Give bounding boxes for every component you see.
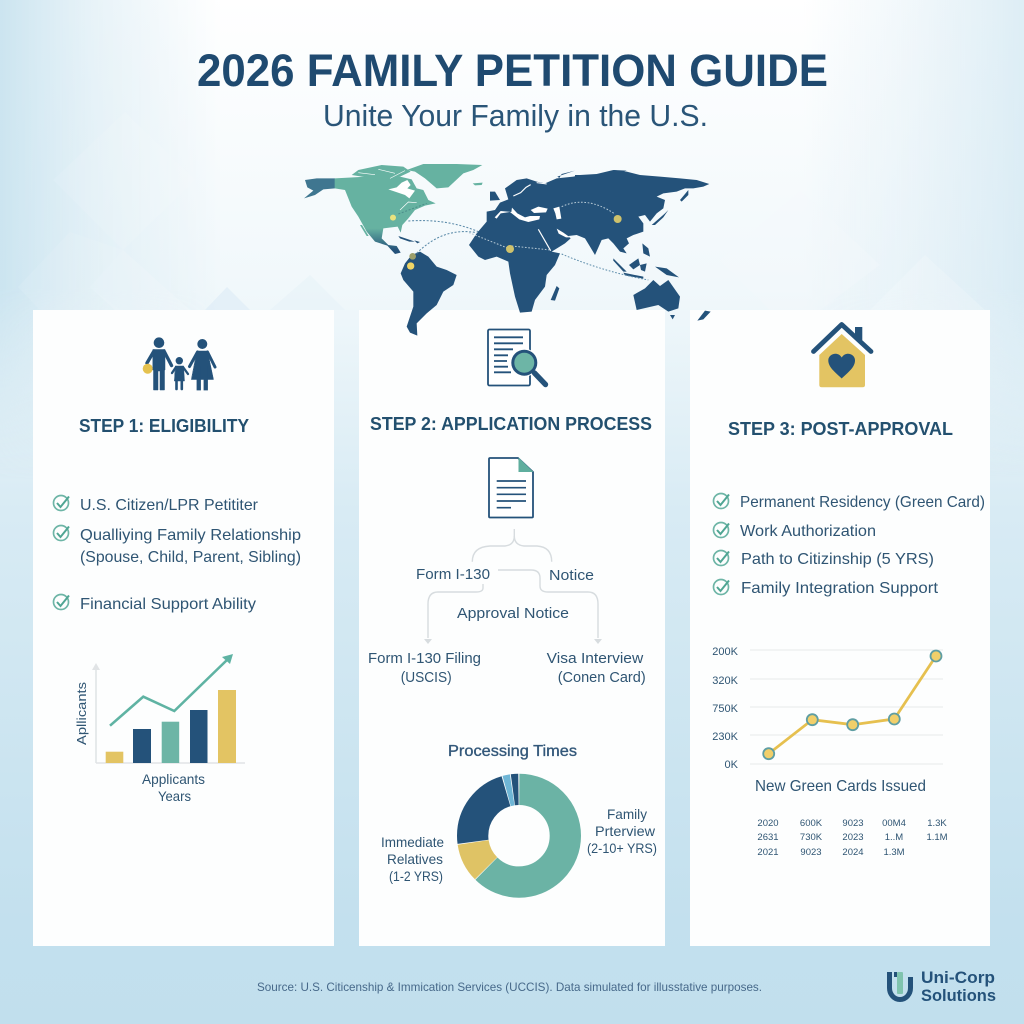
flowchart: process tree: Notice [549,567,594,584]
world map [304,164,711,336]
donut chart: processing times: Processing Times [448,743,577,760]
data table: green cards by year: 2021 [757,847,779,858]
data table: green cards by year: 1.3K [927,818,947,829]
logo: Uni-Corp Solutions [887,968,996,1005]
donut chart: processing times: Prterview [595,823,656,839]
map: eastern markers [506,215,622,253]
check item: residency: Permanent Residency (Green Card) [740,494,985,511]
source note: Source: U.S. Citicenship & Immication Services (UCCIS). Data simulated for illusstative purposes. [257,980,762,994]
heading: step 2: STEP 2: APPLICATION PROCESS [370,414,652,434]
heading: step 3: STEP 3: POST-APPROVAL [728,419,953,439]
title: 2026 FAMILY PETITION GUIDE [197,45,828,96]
map: North America [335,177,436,254]
flowchart: process tree: Form I-130 [416,566,490,583]
line chart: new green cards: 320K [712,675,739,687]
panel: step 1 background [33,310,334,946]
check item: financial: Financial Support Ability [80,596,256,613]
bar chart: applicants: Years [158,788,191,804]
line chart: new green cards: 750K [712,703,739,715]
map: eastern dotted routes [469,202,648,280]
check item: citizenship: Path to Citizinship (5 YRS) [741,551,934,568]
bar chart: applicants [74,654,245,804]
line chart: new green cards [712,646,943,795]
map: Arctic islands [352,165,411,179]
data table: green cards by year: 2024 [842,847,864,858]
flowchart: process tree: (USCIS) [401,669,452,686]
data table: green cards by year: 600K [800,818,823,829]
map: inland seas [495,183,570,251]
data table: green cards by year: 1.1M [926,832,948,843]
icon: house with heart [814,324,871,387]
map: Hudson Bay and lakes [358,169,417,210]
map: Iceland [473,183,483,185]
check item: relationship: (Spouse, Child, Parent, Sibling) [80,549,301,566]
panel 1 content: step 1 eligibility [54,337,301,804]
logo mark [887,972,910,1000]
donut chart: processing times [381,743,657,884]
panel 3 content: step 3 post-approval [712,324,985,858]
logo: Uni-Corp Solutions: Uni-Corp [921,968,995,987]
data table: green cards by year: 1.3M [883,847,905,858]
data table: green cards by year: 2020 [757,818,779,829]
flowchart: process tree: (Conen Card) [558,669,646,686]
icon: document with magnifier [488,330,546,386]
map: western dotted routes [398,203,478,253]
donut chart: processing times: Immediate [381,834,444,850]
map: American markers [390,215,416,270]
line chart: new green cards: New Green Cards Issued [755,778,926,795]
flowchart: process tree: Form I-130 Filing [368,650,481,667]
data table: green cards by year: 2631 [757,832,779,843]
checklist: benefits [714,494,985,597]
map: Australia [633,280,680,312]
data table: green cards by year: 1..M [885,832,903,843]
icon: family [143,337,215,390]
bar chart: applicants: Apllicants [74,681,89,745]
data table: green cards by year: 9023 [842,818,864,829]
donut chart: processing times: Relatives [387,851,443,867]
bar chart: applicants: Applicants [142,771,205,787]
donut chart: processing times: (1-2 YRS) [389,868,443,884]
icon: form document [489,458,534,518]
flowchart: process tree: Approval Notice [457,605,569,622]
logo: Uni-Corp Solutions: Solutions [921,986,996,1005]
check item: relationship: Qualliying Family Relationship [80,527,301,544]
map: Afro-Eurasia and Oceania [469,170,711,321]
check item: citizen: U.S. Citizen/LPR Petititer [80,497,259,514]
flowchart: process tree: Visa Interview [547,650,643,667]
map: Greenland [407,164,482,188]
heading: step 1: STEP 1: ELIGIBILITY [79,416,249,436]
data table: green cards by year: 730K [800,832,823,843]
check item: work: Work Authorization [740,523,876,540]
data table: green cards by year: 00M4 [882,818,906,829]
checklist: eligibility [54,496,301,613]
check item: integration: Family Integration Support [741,580,939,597]
data table: green cards by year: 2023 [842,832,864,843]
map: Caribbean islands [398,236,420,243]
data table: green cards by year [757,818,948,858]
panel: step 2 background [359,310,665,946]
panel 2 content: step 2 application process [368,330,657,884]
map: islands [490,170,711,321]
line chart: new green cards: 0K [725,759,739,771]
panel: step 3 background [690,310,990,946]
flowchart: process tree [368,529,646,686]
map: Baja California [360,225,369,236]
donut chart: processing times: (2-10+ YRS) [587,840,657,856]
data table: green cards by year: 9023 [800,847,822,858]
donut chart: processing times: Family [607,806,647,822]
map: Alaska [304,178,335,198]
line chart: new green cards: 230K [712,731,739,743]
map: Afro-Eurasia landmass [469,170,709,313]
map: South America [401,252,457,336]
check item: relationship [54,526,301,566]
map: Americas [304,164,483,336]
line chart: new green cards: 200K [712,646,739,658]
subtitle: Unite Your Family in the U.S. [323,98,708,133]
